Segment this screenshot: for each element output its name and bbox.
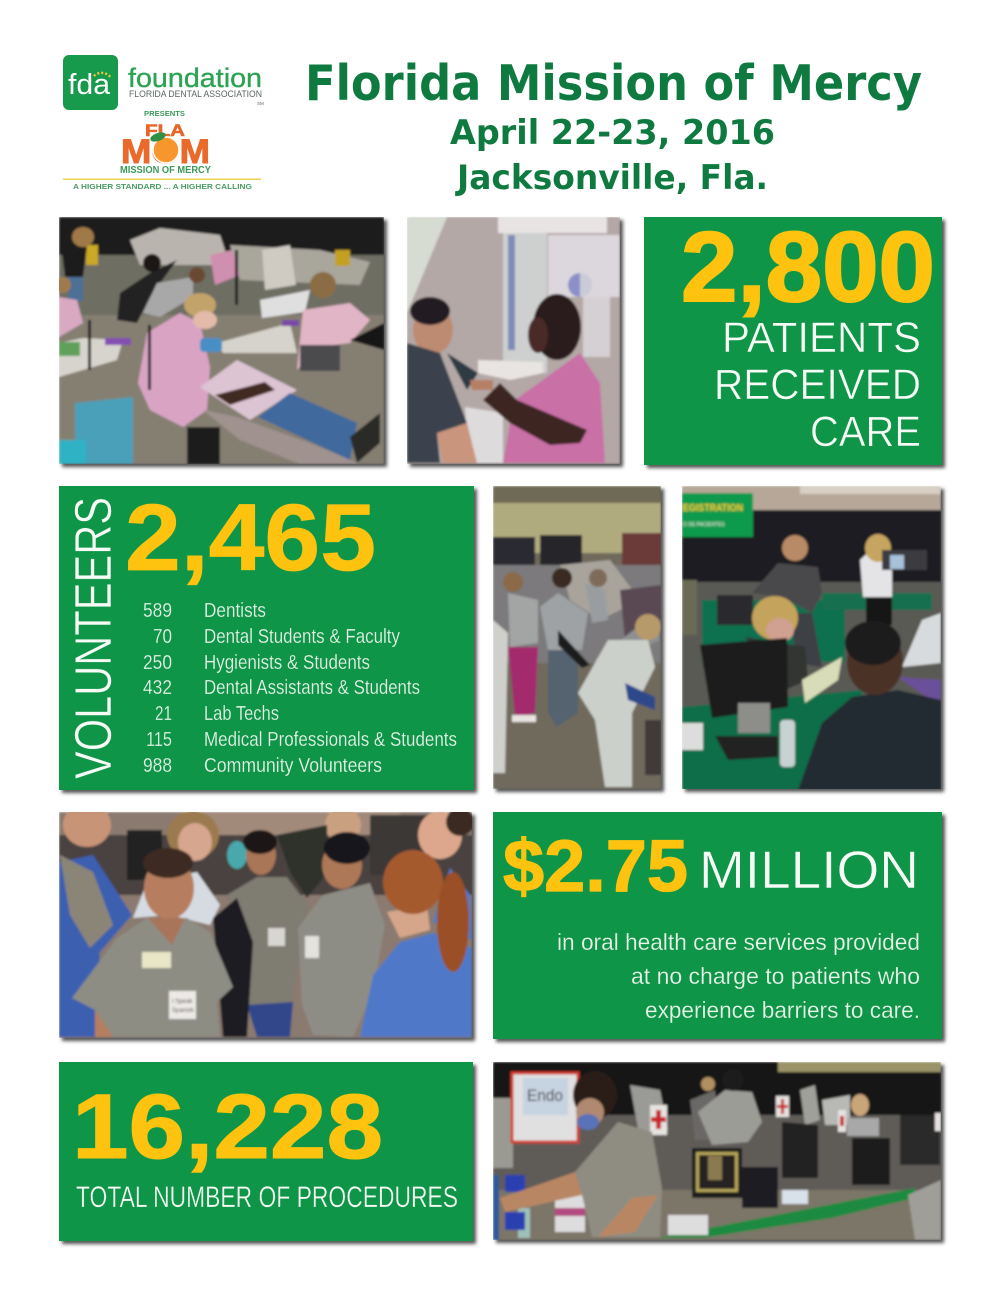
volunteer breakdown list: Dental Assistants & Students [204, 677, 420, 699]
presents: PRESENTS [144, 111, 185, 118]
description text [557, 929, 920, 1023]
panel: $2.75 million [493, 812, 945, 1042]
title block [305, 55, 922, 198]
description text: in oral health care services provided [557, 929, 920, 955]
volunteer breakdown list: Hygienists & Students [204, 652, 370, 674]
logo wordmark: foundation: foundation [128, 63, 262, 93]
photo: smiling volunteers in scrubs [59, 803, 475, 1041]
stat: 2,465: 2,465 [125, 485, 376, 591]
icon: fda green square: fda [68, 69, 111, 101]
location: Jacksonville, Fla. [455, 158, 768, 198]
volunteer breakdown list: 115 [146, 729, 172, 751]
label: received: RECEIVED [714, 361, 921, 409]
service mark: SM [257, 101, 264, 106]
description text: experience barriers to care. [645, 997, 920, 1023]
photo: patient registration area [682, 486, 944, 792]
logo: FDA Foundation and Florida Mission of Mercy [63, 55, 264, 191]
label: million: MILLION [699, 841, 919, 900]
logo subtitle: FLORIDA DENTAL ASSOCIATION [129, 89, 262, 100]
yellow rule [63, 178, 261, 180]
volunteer breakdown list [143, 600, 457, 777]
panel: 16,228 total procedures [59, 1062, 476, 1244]
volunteer breakdown list: 988 [143, 755, 172, 777]
volunteer breakdown list: Community Volunteers [204, 755, 382, 777]
volunteer breakdown list: 432 [143, 677, 172, 699]
volunteer breakdown list: 21 [155, 703, 172, 725]
logo: FLA MOM with orange: MOM [121, 133, 210, 171]
photo: endodontics clinic station: Endo [527, 1086, 563, 1105]
tagline: A HIGHER STANDARD ... A HIGHER CALLING [73, 182, 252, 191]
label: patients: PATIENTS [722, 314, 921, 362]
label: total number of procedures: TOTAL NUMBER OF PROCEDURES [76, 1181, 458, 1214]
stat: 16,228: 16,228 [72, 1076, 383, 1178]
photo: patient registration area: O DE PACIENTES [683, 522, 725, 528]
volunteer breakdown list: Dental Students & Faculty [204, 626, 400, 648]
panel: 2,465 volunteers [59, 485, 477, 793]
volunteer breakdown list: Dentists [204, 600, 266, 622]
volunteer breakdown list: Medical Professionals & Students [204, 729, 457, 751]
volunteer breakdown list: 70 [153, 626, 172, 648]
label: care: CARE [810, 408, 921, 456]
date: April 22-23, 2016 [450, 113, 775, 153]
photo: smiling volunteers in scrubs: I Speak [172, 999, 193, 1005]
mission of mercy: MISSION OF MERCY [120, 164, 211, 176]
photo: patient registration area: EGISTRATION [683, 503, 743, 514]
volunteer breakdown list: 589 [143, 600, 172, 622]
photo: volunteers in grey scrubs in crowded hall [493, 486, 664, 792]
photo: endodontics clinic station [493, 1062, 944, 1243]
description text: at no charge to patients who [631, 963, 920, 989]
panel: 2,800 patients received care [644, 211, 945, 468]
photo: smiling volunteers in scrubs: Spanish [172, 1008, 194, 1014]
photo: dental clinic floor with dentist treating patient [55, 217, 387, 467]
icon: fda green square [63, 55, 118, 110]
stat: $2.75: $2.75 [503, 826, 688, 907]
photo: woman in pink receiving dental x-ray [407, 217, 623, 467]
volunteer breakdown list: Lab Techs [204, 703, 279, 725]
volunteer breakdown list: 250 [143, 652, 172, 674]
vertical label: volunteers: VOLUNTEERS [65, 497, 123, 779]
heading: Florida Mission of Mercy [305, 55, 922, 112]
logo: FLA MOM with orange: FLA [145, 121, 185, 140]
stat: 2,800: 2,800 [681, 211, 935, 322]
